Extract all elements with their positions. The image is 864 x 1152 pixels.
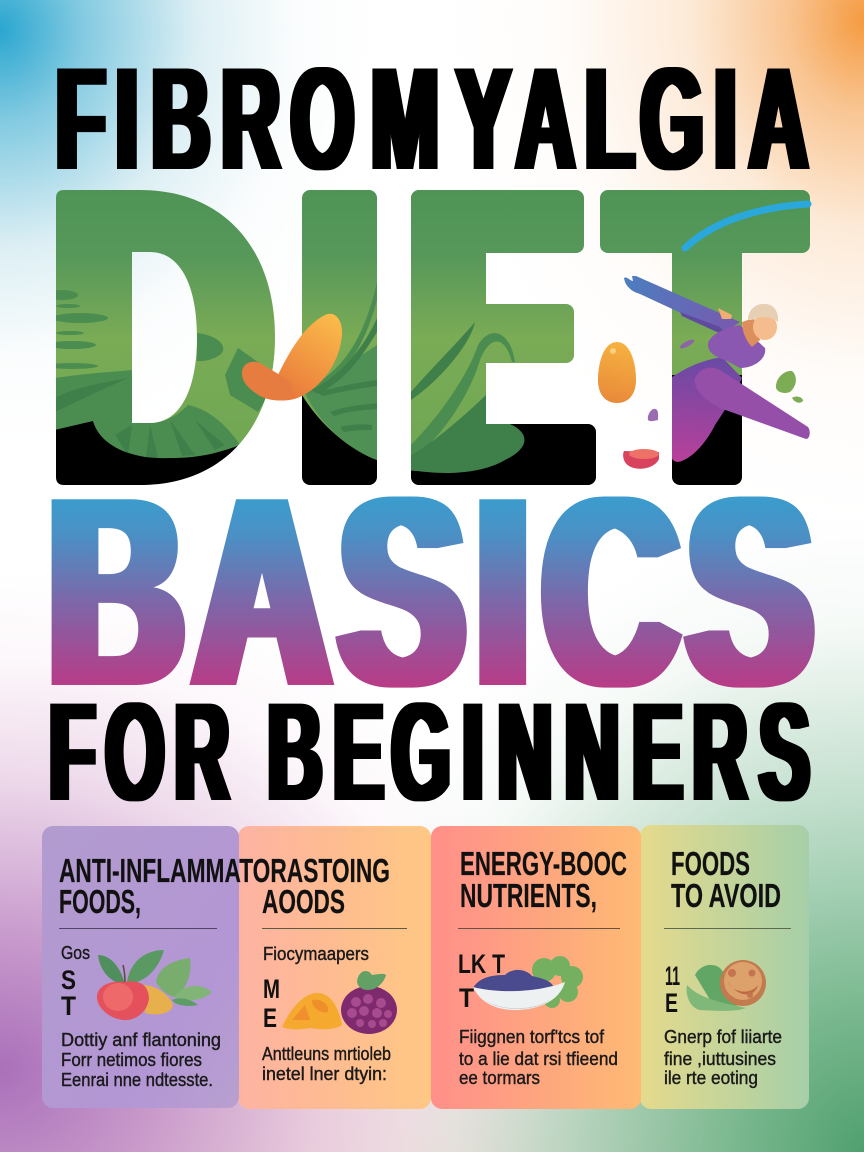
title: FIBROMYALGIA: FIBROMYALGIA bbox=[56, 38, 808, 201]
panel: foods to avoid background bbox=[640, 825, 809, 1109]
panel 1 body text: Dottiy anf flantoning bbox=[61, 1030, 221, 1050]
panel: anti-inflammatory background bbox=[42, 826, 239, 1108]
heading: FOR BEGINNERS: FOR BEGINNERS bbox=[49, 673, 810, 830]
person stretching bbox=[624, 276, 810, 462]
panel 1 letter T: T bbox=[61, 991, 76, 1021]
icon: bowl of berries bbox=[473, 956, 583, 1010]
panel 1 and 2 heading: ANTI-INFLAMMATORASTOING bbox=[59, 852, 390, 889]
panel 3 heading line one: ENERGY-BOOC bbox=[460, 845, 627, 882]
red food piece bbox=[623, 449, 659, 469]
icon: leaves and cookie bbox=[687, 960, 766, 1011]
panel 2 small label: Fiocymaapers bbox=[263, 944, 369, 964]
panel 4 body text: fine ,iuttusines bbox=[664, 1049, 776, 1069]
panel 3 content: energy nutrients bbox=[458, 845, 627, 1088]
panel 4 numerals: 11 bbox=[665, 961, 680, 991]
icon: apple and leaves bbox=[97, 950, 212, 1020]
E: leaves bbox=[411, 322, 475, 400]
panel 1 small label: Gos bbox=[61, 943, 90, 963]
panel 4 letter E: E bbox=[665, 988, 678, 1018]
panel 4 body text bbox=[664, 1027, 782, 1088]
panel 1 body text: Forr netimos fiores bbox=[61, 1050, 202, 1070]
panel 4 heading line two: TO AVOID bbox=[671, 877, 781, 914]
capsule icon bbox=[598, 342, 636, 403]
small purple crumb bbox=[648, 409, 658, 421]
panel 4 heading line one: FOODS bbox=[671, 845, 750, 882]
panel 1 heading second line: FOODS, bbox=[59, 883, 141, 920]
panel 2 body text bbox=[262, 1044, 391, 1084]
orange leaf illustration bbox=[242, 314, 342, 400]
panel 2 body text: Anttleuns mrtioleb bbox=[262, 1044, 391, 1064]
icon: fruit slices and pomegranate bbox=[282, 971, 397, 1034]
panel 2 heading: AOODS bbox=[262, 883, 345, 920]
panel 3 body text bbox=[459, 1027, 618, 1088]
panel 4 body text: ile rte eoting bbox=[664, 1068, 758, 1088]
panel 3 body text: Fiiggnen torf'tcs tof bbox=[459, 1027, 605, 1047]
panel 1 content: anti-inflammatory bbox=[59, 852, 390, 1090]
D: plants bbox=[46, 290, 270, 459]
panel 3 letter T: T bbox=[459, 983, 474, 1013]
panel 1 body text: Eenrai nne ndtesste. bbox=[61, 1070, 213, 1090]
panel 1 letter S: S bbox=[61, 965, 76, 995]
panel 3 divider bbox=[458, 928, 620, 929]
panel 3 heading line two: NUTRIENTS, bbox=[460, 877, 597, 914]
panel 2 content bbox=[262, 883, 407, 1084]
panel 1 divider bbox=[59, 928, 217, 929]
panel 4 body text: Gnerp fof liiarte bbox=[664, 1027, 782, 1047]
title: DIET illustrated letters bbox=[56, 190, 810, 485]
panel 4 divider bbox=[664, 928, 791, 929]
panel 2 body text: inetel lner dtyin: bbox=[262, 1064, 387, 1084]
panel 3 letters: LK T bbox=[458, 949, 505, 979]
panel 3 body text: ee tormars bbox=[459, 1068, 540, 1088]
green leaf bits bbox=[776, 371, 803, 403]
black base shapes bbox=[56, 421, 238, 485]
icon: blue swoosh bbox=[685, 204, 808, 248]
panel 1 body text bbox=[61, 1030, 221, 1090]
I: leaves bbox=[305, 345, 377, 460]
panel 2 letter M: M bbox=[263, 974, 280, 1004]
panel 3 body text: to a lie dat rsi tfieend bbox=[459, 1049, 618, 1069]
panel 2 letter E: E bbox=[263, 1003, 277, 1033]
panel 2 divider bbox=[262, 928, 407, 929]
panel: energy background bbox=[431, 826, 641, 1109]
heading: BASICS: BASICS bbox=[49, 442, 812, 743]
panel: second food background bbox=[238, 826, 431, 1109]
panel 4 content: foods to avoid bbox=[664, 845, 791, 1088]
